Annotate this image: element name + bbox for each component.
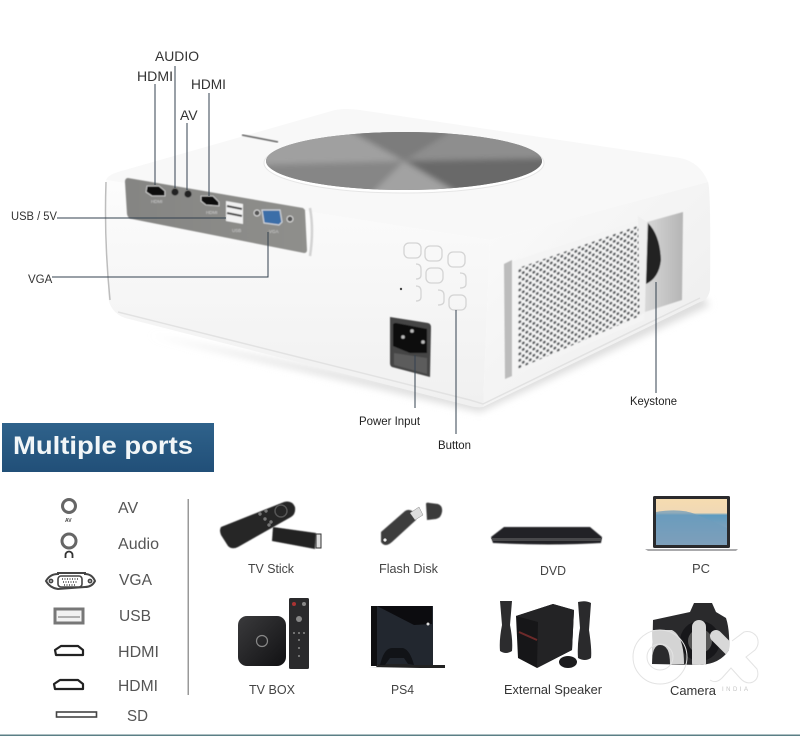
device: PS4 bbox=[369, 606, 445, 697]
port list bbox=[46, 500, 159, 725]
device: External Speaker: External Speaker bbox=[504, 682, 603, 697]
vent grille bbox=[504, 220, 644, 379]
port panel bbox=[125, 178, 312, 256]
callout label: USB / 5V: USB / 5V bbox=[11, 211, 57, 223]
lens window bbox=[638, 212, 683, 316]
device: TV Stick: TV Stick bbox=[248, 561, 294, 576]
device: Flash Disk: Flash Disk bbox=[379, 561, 438, 576]
heading banner: Multiple ports bbox=[13, 432, 193, 460]
callout label: Power Input: Power Input bbox=[359, 416, 421, 428]
device: TV Stick bbox=[220, 502, 321, 576]
port panel: USB bbox=[232, 228, 241, 233]
device: PC: PC bbox=[692, 561, 710, 576]
icon: HDMI bbox=[55, 646, 83, 655]
port panel: HDMI bbox=[151, 199, 162, 204]
label: HDMI second: HDMI bbox=[118, 678, 158, 695]
list divider bbox=[188, 499, 189, 695]
callout label: Keystone: Keystone bbox=[630, 396, 677, 408]
bottom edge line bbox=[0, 734, 800, 736]
projector body bbox=[106, 109, 710, 412]
device: Camera: Camera bbox=[670, 683, 717, 698]
device: External Speaker bbox=[500, 601, 603, 697]
callout label: Button: Button bbox=[438, 440, 471, 452]
top logo bbox=[242, 135, 278, 142]
callout label: HDMI left: HDMI bbox=[137, 68, 173, 84]
icon: Audio bbox=[62, 534, 76, 558]
label: Audio: Audio bbox=[118, 536, 159, 553]
button grid bbox=[404, 243, 466, 310]
label: AV: AV bbox=[118, 500, 138, 517]
watermark: OLX logo: INDIA bbox=[722, 687, 751, 693]
port panel: HDMI bbox=[206, 210, 218, 215]
device: DVD bbox=[491, 527, 602, 578]
watermark fill over camera bbox=[652, 620, 730, 665]
label: HDMI: HDMI bbox=[118, 644, 159, 661]
projector side face bbox=[483, 182, 710, 407]
device: DVD: DVD bbox=[540, 563, 566, 578]
HDMI port 1 bbox=[146, 186, 165, 196]
AV jack bbox=[184, 190, 192, 198]
callout label: AUDIO: AUDIO bbox=[155, 48, 199, 64]
icon: SD bbox=[56, 712, 96, 717]
icon: AV bbox=[62, 500, 76, 524]
watermark outline bbox=[633, 630, 758, 684]
remote bbox=[220, 502, 295, 548]
device: PC bbox=[645, 496, 738, 576]
icon: AV: AV bbox=[65, 518, 72, 524]
stick bbox=[272, 527, 316, 549]
device: Flash Disk bbox=[379, 503, 442, 576]
port panel: VGA bbox=[269, 229, 279, 234]
VGA port bbox=[254, 210, 293, 225]
label: SD: SD bbox=[127, 708, 148, 725]
label: USB: USB bbox=[119, 608, 151, 625]
HDMI port 2 bbox=[201, 196, 219, 206]
heading banner bbox=[2, 423, 214, 472]
icon: USB bbox=[55, 609, 83, 623]
projector shadow bbox=[150, 295, 710, 412]
power socket bbox=[390, 317, 431, 377]
device: TV BOX: TV BOX bbox=[249, 682, 295, 697]
callout label: VGA: VGA bbox=[28, 274, 53, 286]
callout label: AV: AV bbox=[180, 107, 198, 123]
callout lines bbox=[52, 66, 656, 434]
audio jack bbox=[171, 188, 179, 196]
projector front face bbox=[106, 180, 490, 407]
icon: VGA bbox=[46, 573, 95, 589]
lens disc on top bbox=[264, 132, 544, 194]
watermark: OLX logo bbox=[633, 620, 758, 693]
label: VGA: VGA bbox=[119, 572, 152, 589]
device: PS4: PS4 bbox=[391, 682, 414, 697]
device: Camera bbox=[652, 603, 729, 698]
projector top face bbox=[106, 109, 708, 240]
device: TV BOX bbox=[238, 598, 309, 697]
callout label: HDMI right: HDMI bbox=[191, 76, 226, 92]
icon: HDMI second bbox=[54, 680, 83, 689]
USB ports bbox=[226, 201, 243, 224]
